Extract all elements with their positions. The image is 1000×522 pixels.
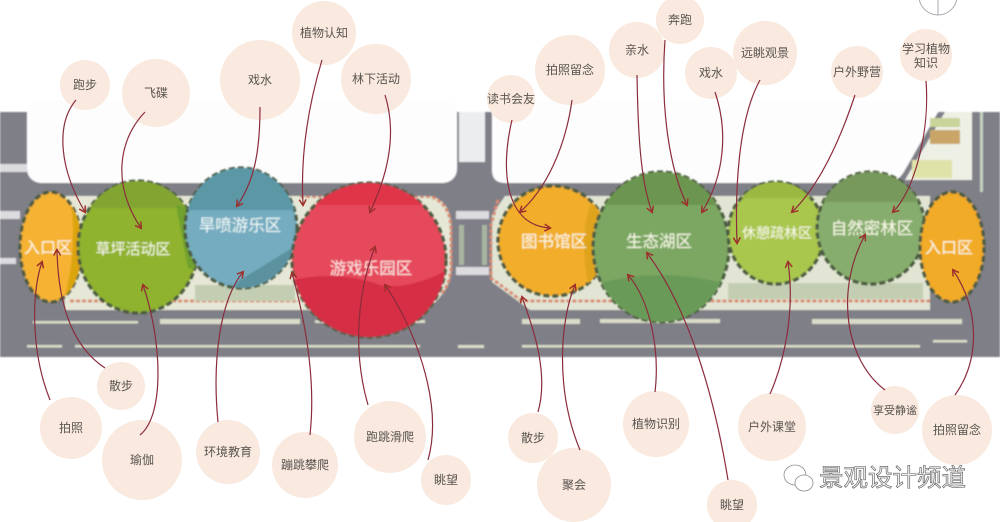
zone: eco lake [593,172,730,325]
bubble: 飞碟 [122,59,190,127]
zone: open woodland rest: 休憩疏林区 [742,225,812,241]
park strip: west [60,196,451,310]
zone: west entrance: 入口区 [24,240,72,257]
bubble: 学习植物知识: 知识 [914,56,938,70]
bubble: 植物识别 [623,391,689,457]
bubble: 聚会: 聚会 [562,478,586,492]
bubble: 戏水 west [220,40,300,120]
bubble: 植物认知 [292,1,356,65]
zone: dense forest [817,172,925,284]
bubble: 眺望 east: 眺望 [720,498,744,512]
zone: dry fountain [185,168,297,290]
bubble: 享受静谧 [871,386,919,434]
zone: dense forest: 自然密林区 [831,219,913,238]
bubble: 戏水 east [685,47,737,99]
building lot: east [492,100,945,183]
bubble: 户外野营 [831,46,883,98]
bubble: 飞碟: 飞碟 [144,86,168,100]
zone: eco lake: 生态湖区 [626,232,692,251]
bubble: 奔跑: 奔跑 [668,13,692,27]
bubble: 散步 west: 散步 [109,378,133,393]
zone: lawn activity [78,180,200,313]
zone: east entrance [920,192,984,302]
bubble: 眺望 west [421,455,471,505]
bubble: 亲水: 亲水 [625,43,649,57]
bubble: 享受静谧: 享受静谧 [873,403,917,417]
bubble: 戏水 east: 戏水 [699,66,723,80]
zone: library [498,186,610,296]
zone: playground: 游戏乐园区 [330,259,412,278]
road markings [27,319,967,348]
bubble: 拍照留念 south [922,395,992,465]
bubble: 跑步: 跑步 [73,78,97,92]
watermark text: 景观设计频道 [819,464,966,492]
icon: north compass [919,0,957,15]
bubble: 户外课堂 [738,393,806,461]
bubble: 环境教育: 环境教育 [204,444,252,459]
zone: lawn activity: 草坪活动区 [95,241,171,258]
bubble: 拍照 [40,397,102,459]
bubble: 跑跳滑爬 [354,401,426,473]
bubble: 户外野营: 户外野营 [833,64,881,79]
bubble: 跑跳滑爬: 跑跳滑爬 [366,430,414,444]
corner planting plan [905,112,983,192]
bubble: 蹦跳攀爬: 蹦跳攀爬 [281,458,329,472]
bubble: 蹦跳攀爬 [272,432,338,498]
planting band under circles [195,283,923,301]
bubble: 植物认知: 植物认知 [300,25,348,40]
zone: dry fountain: 旱喷游乐区 [199,216,281,235]
bubble: 瑜伽 [102,420,182,500]
bubble: 林下活动 [341,44,411,114]
bubble: 读书会友 [487,75,535,123]
bubble: 散步 east [508,413,558,463]
bubble: 散步 west [97,362,145,410]
bubble: 聚会 [537,448,611,522]
crossing road stripes [0,112,489,275]
bubble: 户外课堂: 户外课堂 [748,419,796,434]
bubble: 亲水 [609,22,665,78]
bubble: 植物识别: 植物识别 [632,416,680,431]
bubble: 眺望 west: 眺望 [434,473,458,487]
watermark: channel name [784,464,966,492]
zone: library: 图书馆区 [521,232,587,251]
zone: east entrance: 入口区 [925,240,973,257]
icon: chat bubbles [784,465,813,491]
bubble: 戏水 west: 戏水 [248,73,272,87]
dashed paving edge [432,197,451,295]
zone: open woodland rest [728,182,824,284]
bubble: 散步 east: 散步 [521,430,545,445]
zone: playground [292,183,447,340]
bubble: 拍照留念 south: 拍照留念 [933,422,981,437]
bubble: 学习植物知识 [900,29,952,81]
functional zones [20,168,984,340]
zone: west entrance [20,190,90,302]
bubble: 眺望 east [707,480,757,522]
bubble: 瑜伽: 瑜伽 [130,452,154,467]
park strip: east [492,196,930,310]
bubble: 环境教育 [196,420,260,484]
bubble: 学习植物知识: 学习植物 [902,41,950,56]
building lot: west [27,100,457,183]
bubble: 奔跑 [656,0,704,44]
bubble: 林下活动: 林下活动 [352,72,400,86]
bubble: 远眺观景: 远眺观景 [741,46,789,60]
bubble: 拍照: 拍照 [59,420,83,435]
bubble: 拍照留念 north [535,35,605,105]
panel: site plan base [0,100,1000,357]
bubble: 拍照留念 north: 拍照留念 [546,62,594,77]
bubble: 读书会友: 读书会友 [487,92,535,106]
bubble: 跑步 [60,60,110,110]
bubble: 远眺观景 [733,21,797,85]
arrows linking activities to zones [35,40,974,480]
